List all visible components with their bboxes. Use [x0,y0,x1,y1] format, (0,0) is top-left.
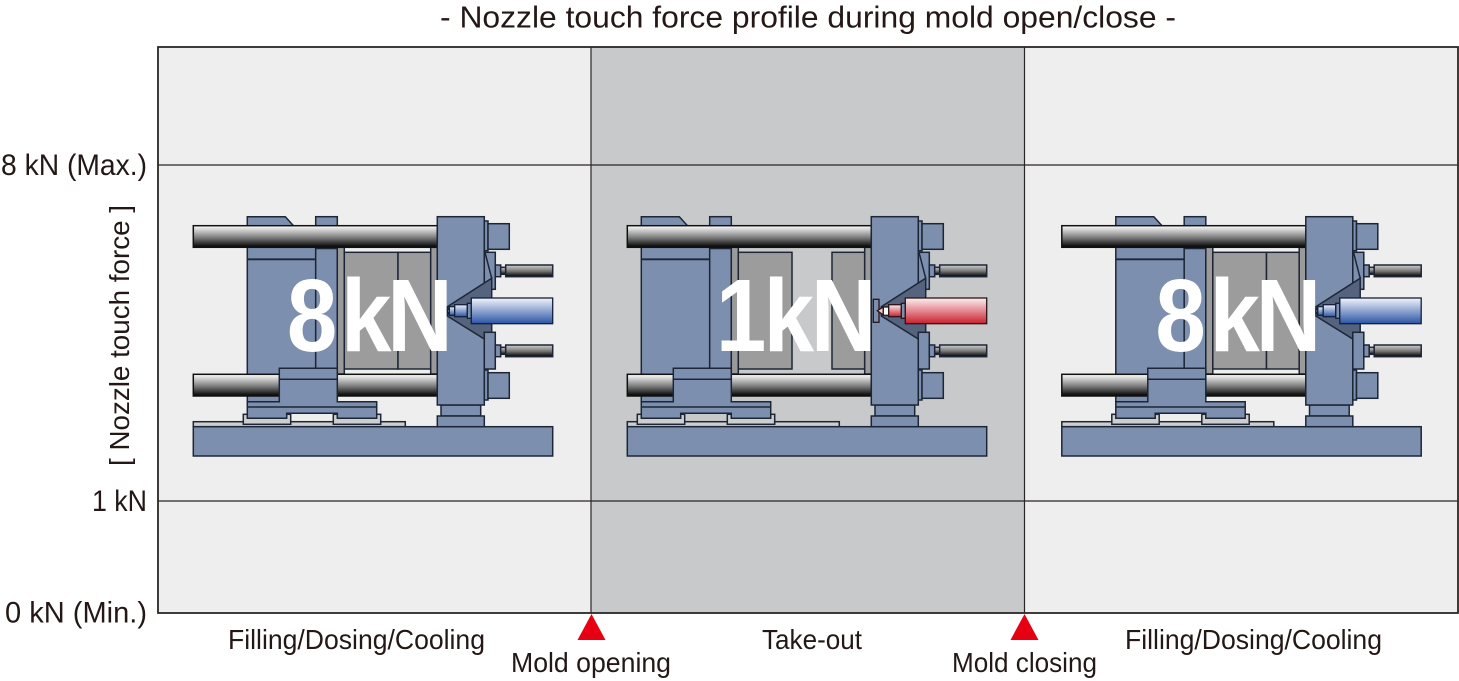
phase label: filling right: Filling/Dosing/Cooling [1125,624,1382,655]
chart background: take-out phase [591,47,1024,613]
force value: 1kN center: 1kN [716,258,876,373]
icon: red nozzle cylinder [873,298,987,324]
icon: blue nozzle cylinder [447,298,553,324]
tick label: 1 kN: 1 kN [92,485,147,518]
force value: 8kN left: 8kN [287,258,453,373]
marker: mold opening triangle [578,614,606,640]
machine: right, nozzle touching at 8 kN [1062,217,1421,456]
machine: center, nozzle retracted at 1 kN [627,217,987,456]
title: - Nozzle touch force profile during mold open/close - [440,0,1176,34]
tick label: 0 kN min: 0 kN (Min.) [5,597,147,630]
phase label: filling left: Filling/Dosing/Cooling [228,624,485,655]
chart background: left phase [158,47,591,613]
marker: mold closing triangle [1010,614,1038,640]
machine: left, nozzle touching at 8 kN [193,217,553,456]
chart background: right phase [1024,47,1458,613]
tick label: 8 kN max: 8 kN (Max.) [1,149,147,182]
marker label: mold opening: Mold opening [511,647,671,678]
marker label: mold closing: Mold closing [952,647,1097,678]
phase label: take-out: Take-out [762,624,862,655]
force value: 8kN right: 8kN [1155,258,1321,373]
y axis label: [ Nozzle touch force ] [104,205,135,466]
